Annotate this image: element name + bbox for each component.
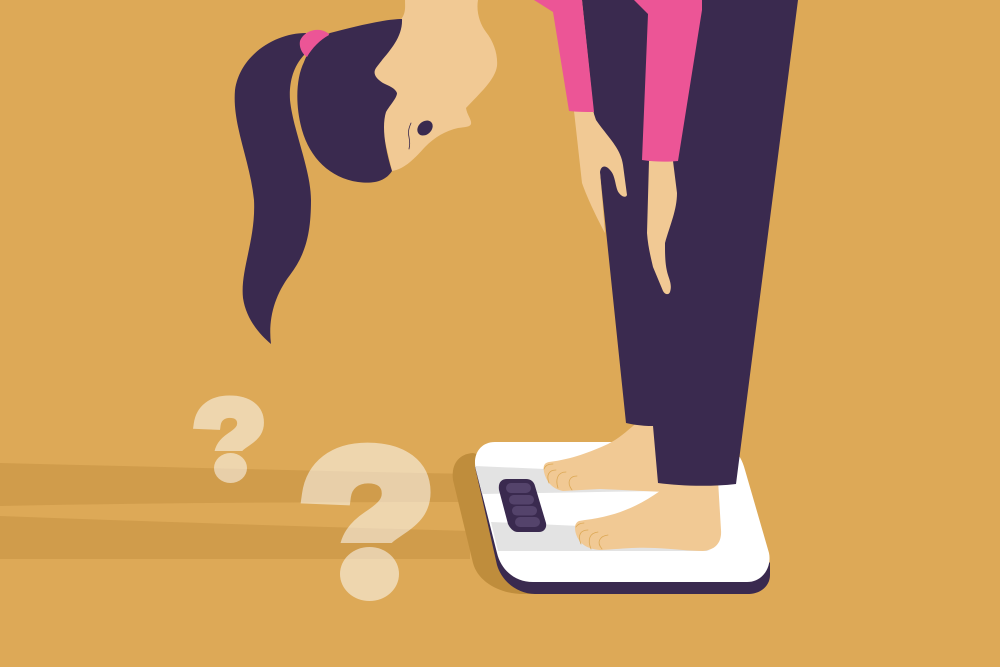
- nose line: [408, 123, 411, 149]
- ponytail: [235, 33, 311, 344]
- scale: [453, 442, 770, 594]
- right hand: [647, 161, 677, 294]
- eye: [414, 117, 436, 139]
- left hand: [574, 111, 627, 233]
- scale stripes: [475, 466, 710, 551]
- illustration: woman on a scale: [0, 0, 798, 601]
- question marks: [193, 396, 431, 601]
- scale display: [499, 479, 546, 532]
- right sleeve: [634, 0, 702, 162]
- question marks: ?: [194, 379, 265, 503]
- front foot: [575, 480, 721, 551]
- question marks: ?: [301, 409, 434, 639]
- face: [370, 0, 497, 171]
- scale cast shadow: [453, 453, 560, 594]
- left sleeve: [534, 0, 594, 112]
- scale base: [475, 467, 770, 594]
- hair: [297, 19, 402, 183]
- scale top: [475, 442, 770, 582]
- trousers: [582, 0, 798, 486]
- back foot: [544, 420, 680, 492]
- hair tie: [300, 30, 329, 57]
- motion streaks: [0, 463, 470, 559]
